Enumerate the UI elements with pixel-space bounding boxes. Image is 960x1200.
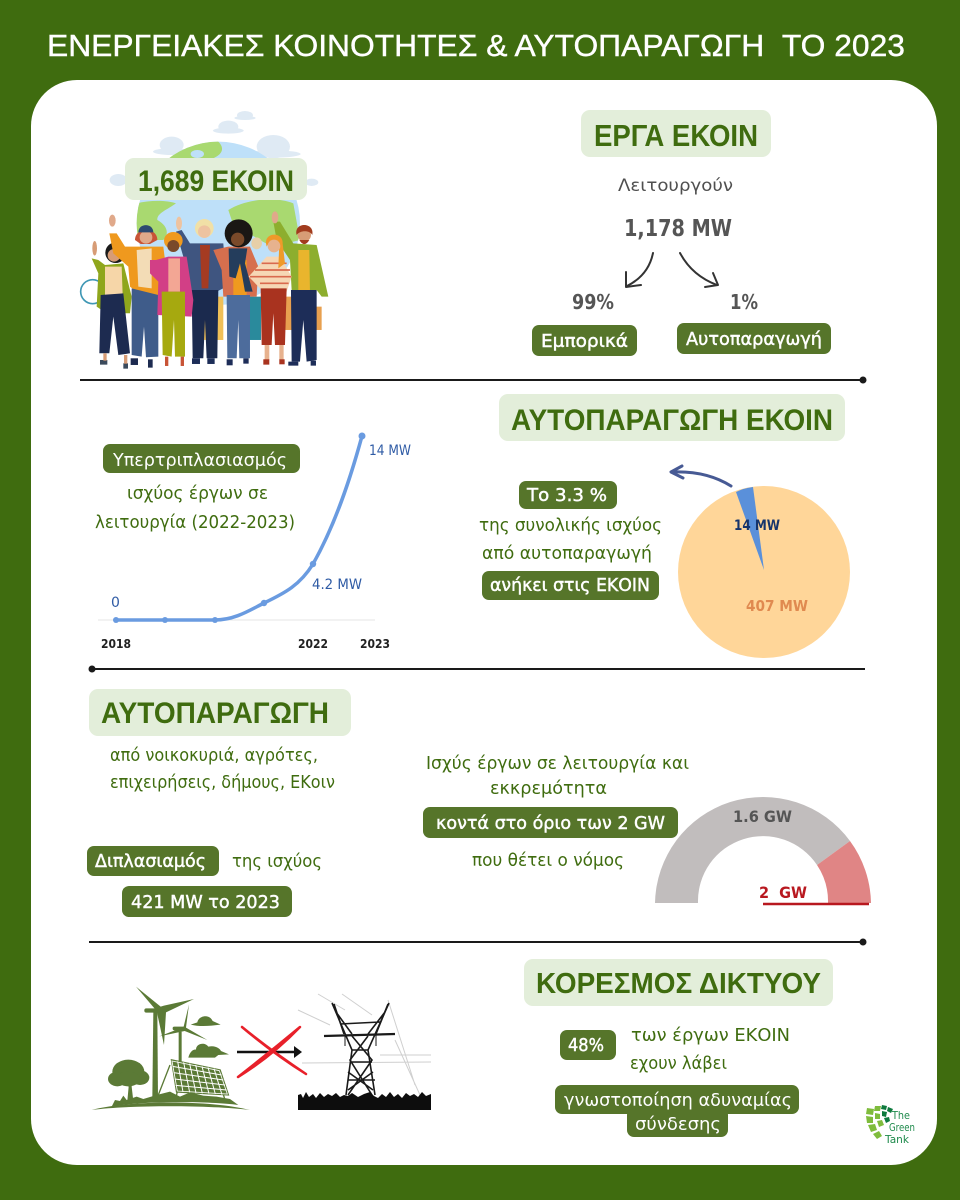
line chart: capacity 2018-2023: 2018 bbox=[101, 637, 131, 651]
turbine 1 bbox=[152, 1012, 158, 1098]
person 7 bbox=[272, 211, 328, 366]
text: share of total capacity: της συνολικής ισχύος bbox=[479, 515, 662, 536]
logo: The Green Tank bbox=[866, 1105, 915, 1146]
person 3 bbox=[150, 232, 193, 366]
arrows: split left and right bbox=[626, 253, 718, 287]
text: share of total capacity bbox=[479, 515, 662, 564]
person 2 bbox=[109, 215, 165, 368]
stat: 99%: 99% bbox=[572, 290, 614, 314]
label: κοντά στο όριο των 2 GW bbox=[423, 807, 678, 838]
label: κοντά στο όριο των 2 GW: κοντά στο όριο των 2 GW bbox=[436, 813, 665, 834]
heading: ΑΥΤΟΠΑΡΑΓΩΓΗ bbox=[89, 689, 351, 736]
line chart: capacity 2018-2023: 2023 bbox=[360, 637, 390, 651]
label: 48% bbox=[560, 1030, 616, 1060]
label: 421 MW το 2023 bbox=[122, 886, 292, 917]
text: grid saturation description bbox=[630, 1025, 790, 1074]
text: capacity in operation and pending: Ισχύς έργων σε λειτουργία και bbox=[426, 753, 689, 774]
icon: electricity pylon bbox=[298, 994, 431, 1110]
logo: The Green Tank: Tank bbox=[884, 1133, 910, 1146]
person 5 bbox=[213, 219, 258, 365]
stat: 1%: 1% bbox=[730, 290, 758, 314]
pie chart: 14 MW vs 407 MW: 407 MW bbox=[746, 597, 808, 615]
label: Αυτοπαραγωγή: Αυτοπαραγωγή bbox=[686, 329, 822, 350]
text: capacity in operation and pending: εκκρεμότητα bbox=[490, 778, 607, 799]
turbine 2 bbox=[179, 1032, 182, 1062]
background crowd bbox=[203, 237, 322, 340]
heading: ΑΥΤΟΠΑΡΑΓΩΓΗ ΕΚΟΙΝ bbox=[499, 394, 845, 441]
label: Υπερτριπλασιασμός: Υπερτριπλασιασμός bbox=[112, 450, 287, 471]
text: Λειτουργούν: Λειτουργούν bbox=[618, 176, 733, 196]
stat badge: 1,689 ΕΚΟΙΝ: 1,689 ΕΚΟΙΝ bbox=[138, 165, 294, 198]
label: connection inability notice bbox=[555, 1085, 799, 1137]
arrow: pie slice to text bbox=[671, 466, 731, 486]
title: ΕΝΕΡΓΕΙΑΚΕΣ ΚΟΙΝΟΤΗΤΕΣ & ΑΥΤΟΠΑΡΑΓΩΓΗ ΤΟ 2023 bbox=[47, 28, 905, 63]
logo: The Green Tank: Green bbox=[889, 1121, 915, 1134]
text: who self-produces bbox=[110, 745, 335, 793]
label: ανήκει στις ΕΚΟΙΝ: ανήκει στις ΕΚΟΙΝ bbox=[490, 575, 650, 596]
icon: bicycle wheel bbox=[81, 280, 105, 304]
text: capacity description bbox=[95, 483, 295, 533]
icon: globe bbox=[133, 140, 303, 310]
label: Το 3.3 %: Το 3.3 % bbox=[526, 485, 607, 506]
gauge chart: 1.6 GW of 2 GW bbox=[655, 797, 871, 904]
text: grid saturation description: εχουν λάβει bbox=[630, 1053, 727, 1074]
label: Το 3.3 % bbox=[519, 481, 617, 509]
label: 48%: 48% bbox=[568, 1035, 604, 1056]
person 6 bbox=[249, 235, 292, 365]
text: της ισχύος: της ισχύος bbox=[232, 851, 322, 872]
stat: 1,178 MW: 1,178 MW bbox=[624, 216, 732, 242]
gauge chart: 1.6 GW of 2 GW: 1.6 GW bbox=[733, 807, 792, 826]
pie chart: 14 MW vs 407 MW: 14 MW bbox=[734, 518, 780, 534]
clouds bbox=[191, 1016, 221, 1026]
line chart: capacity 2018-2023: 4.2 MW bbox=[312, 577, 362, 593]
tree bbox=[123, 1082, 133, 1101]
illustration: community in front of globe bbox=[81, 111, 328, 369]
label: Διπλασιαμός bbox=[87, 846, 219, 876]
label: Αυτοπαραγωγή bbox=[677, 323, 831, 354]
logo: The Green Tank: The bbox=[891, 1109, 910, 1122]
heading: ΚΟΡΕΣΜΟΣ ΔΙΚΤΥΟΥ: ΚΟΡΕΣΜΟΣ ΔΙΚΤΥΟΥ bbox=[536, 968, 821, 1000]
heading: ΕΡΓΑ ΕΚΟΙΝ: ΕΡΓΑ ΕΚΟΙΝ bbox=[594, 118, 758, 153]
gauge chart: 1.6 GW of 2 GW: 2 GW bbox=[759, 883, 807, 902]
label: connection inability notice: σύνδεσης bbox=[635, 1114, 721, 1135]
text: capacity description: ισχύος έργων σε bbox=[127, 483, 268, 504]
heading: ΑΥΤΟΠΑΡΑΓΩΓΗ ΕΚΟΙΝ: ΑΥΤΟΠΑΡΑΓΩΓΗ ΕΚΟΙΝ bbox=[511, 404, 833, 437]
text: share of total capacity: από αυτοπαραγωγή bbox=[482, 543, 652, 564]
text: who self-produces: επιχειρήσεις, δήμους, ΕΚοιν bbox=[110, 772, 335, 793]
icon: renewable energy landscape bbox=[92, 987, 250, 1110]
person 4 bbox=[176, 217, 227, 364]
line chart: capacity 2018-2023: 0 bbox=[111, 595, 120, 611]
label: Υπερτριπλασιασμός bbox=[103, 444, 300, 473]
icon: clouds behind globe bbox=[110, 111, 318, 186]
label: Διπλασιαμός: Διπλασιαμός bbox=[95, 851, 206, 872]
text: grid saturation description: των έργων ΕΚΟΙΝ bbox=[631, 1025, 790, 1046]
label: 421 MW το 2023: 421 MW το 2023 bbox=[131, 892, 280, 913]
pie chart: 14 MW vs 407 MW bbox=[678, 486, 850, 658]
person 1 bbox=[92, 241, 132, 369]
line chart: capacity 2018-2023: 2022 bbox=[298, 637, 328, 651]
text: capacity in operation and pending bbox=[426, 753, 689, 799]
label: connection inability notice: γνωστοποίηση αδυναμίας bbox=[564, 1090, 792, 1111]
heading: ΚΟΡΕΣΜΟΣ ΔΙΚΤΥΟΥ bbox=[524, 959, 833, 1006]
icon: red cross over arrow bbox=[237, 1027, 306, 1077]
heading: ΑΥΤΟΠΑΡΑΓΩΓΗ: ΑΥΤΟΠΑΡΑΓΩΓΗ bbox=[101, 697, 329, 730]
solar panel bbox=[158, 1065, 170, 1097]
text: που θέτει ο νόμος: που θέτει ο νόμος bbox=[472, 850, 624, 871]
heading: ΕΡΓΑ ΕΚΟΙΝ bbox=[581, 110, 771, 157]
ground and grass bbox=[92, 1102, 250, 1110]
line chart: capacity 2018-2023: 14 MW bbox=[369, 443, 411, 459]
line chart: capacity 2018-2023 bbox=[98, 432, 411, 651]
text: capacity description: λειτουργία (2022-2023) bbox=[95, 512, 295, 533]
text: who self-produces: από νοικοκυριά, αγρότες, bbox=[110, 745, 318, 766]
label: ανήκει στις ΕΚΟΙΝ bbox=[482, 571, 659, 600]
label: Εμπορικά bbox=[532, 325, 637, 356]
label: Εμπορικά: Εμπορικά bbox=[541, 331, 628, 352]
